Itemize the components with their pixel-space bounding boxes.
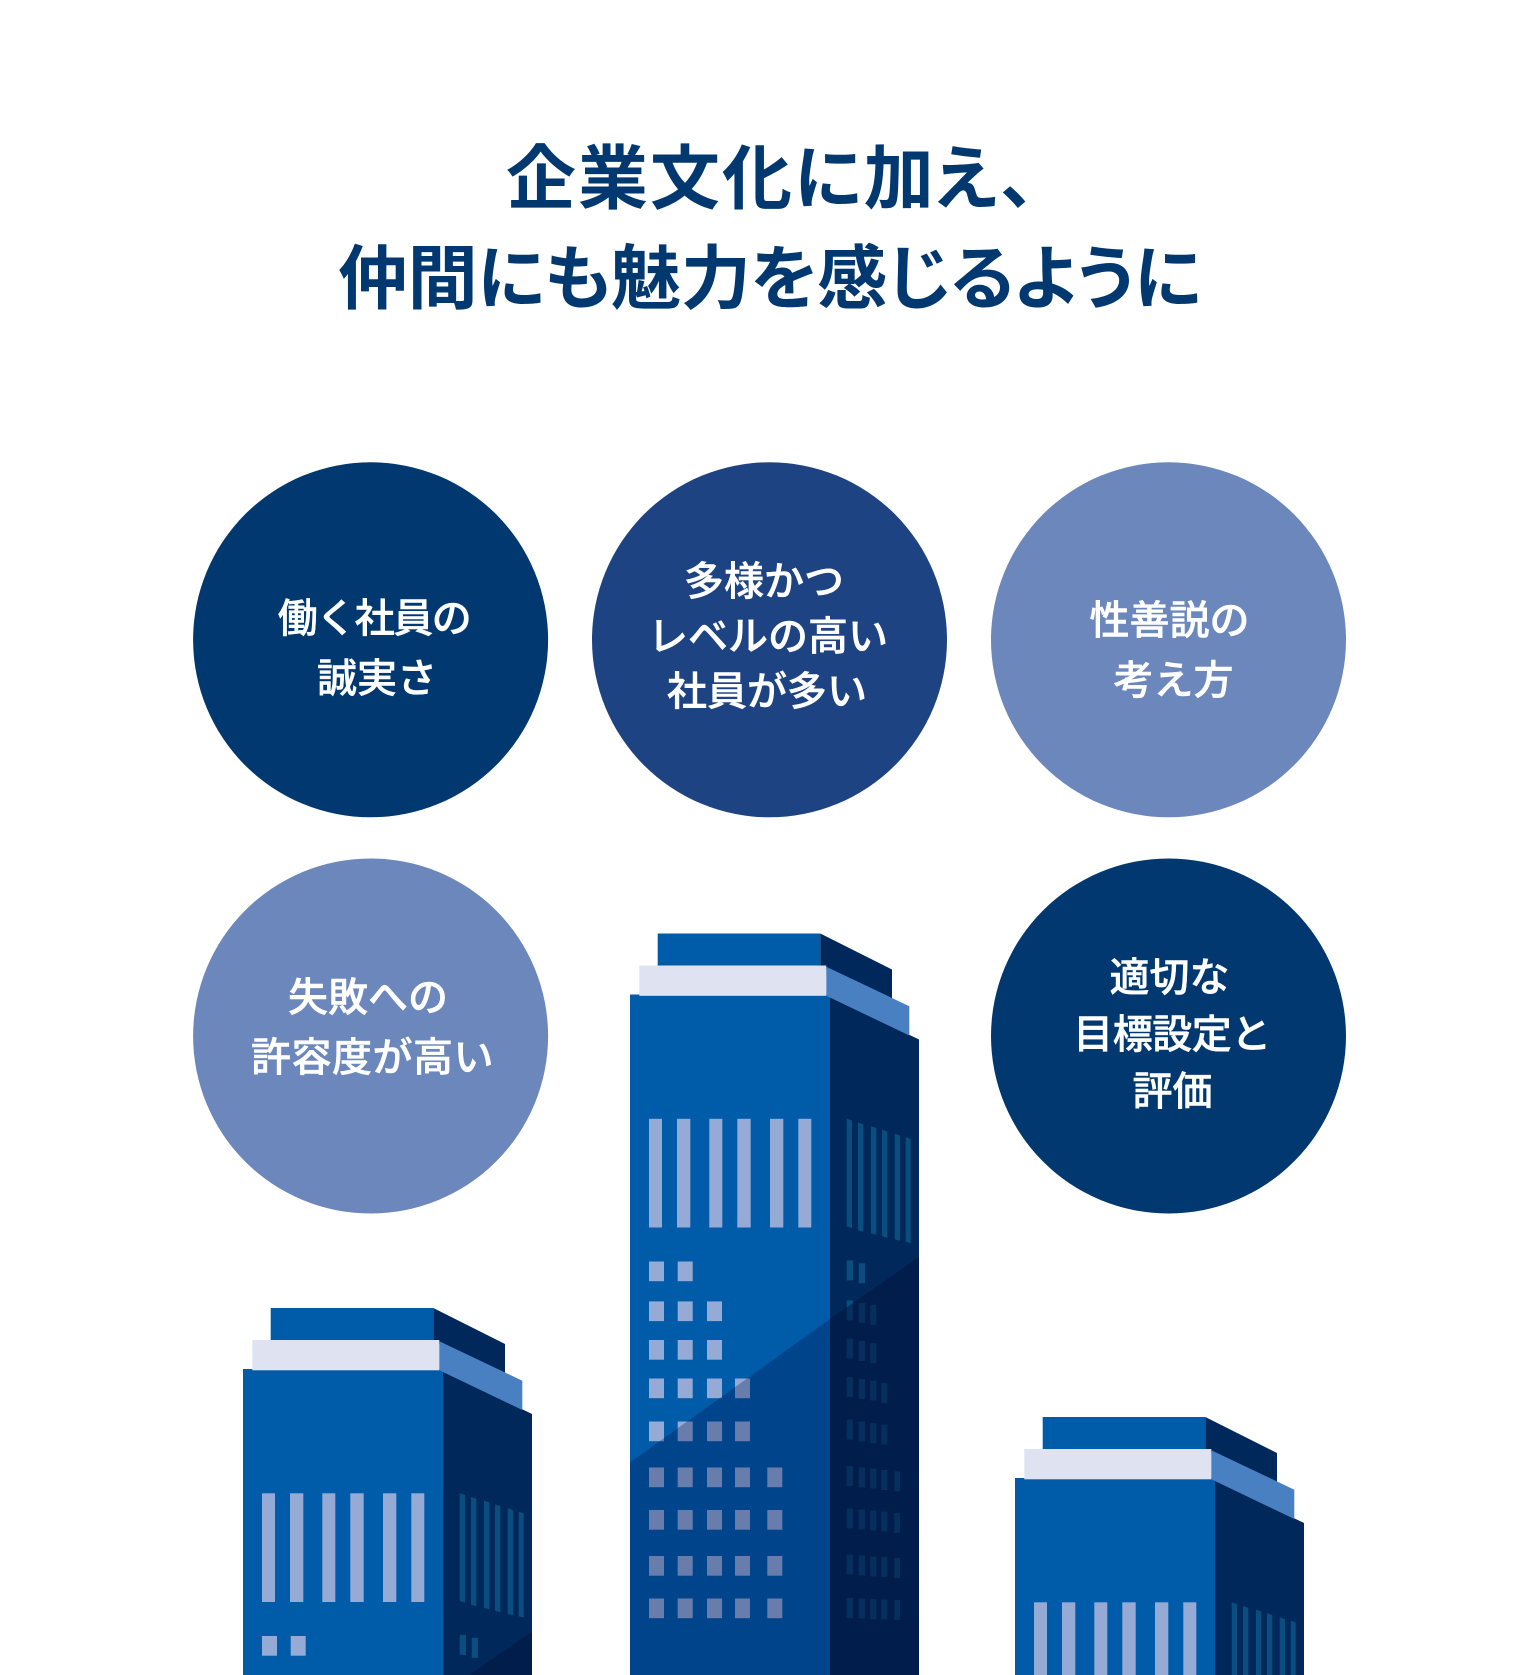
building: center tower: [630, 934, 919, 1675]
circle: 適切な目標設定と評価: 目標設定と: [1073, 1013, 1271, 1057]
circle: 適切な目標設定と評価: [991, 858, 1346, 1214]
circle: 多様かつレベルの高い社員が多い: 多様かつ: [684, 560, 844, 604]
circle: 多様かつレベルの高い社員が多い: レベルの高い: [648, 615, 888, 659]
circle: 適切な目標設定と評価: 評価: [1132, 1070, 1212, 1114]
circle: 性善説の考え方: 性善説の: [1090, 599, 1250, 643]
circle: 適切な目標設定と評価: 適切な: [1110, 956, 1230, 1000]
circle: 性善説の考え方: [991, 462, 1346, 817]
circle: 失敗への許容度が高い: 失敗への: [288, 976, 448, 1020]
title: 企業文化に加え、: [506, 140, 1037, 218]
building: right tower: [1015, 1417, 1304, 1675]
circle: 多様かつレベルの高い社員が多い: [592, 462, 947, 817]
title: [338, 140, 1201, 318]
circle: 多様かつレベルの高い社員が多い: 社員が多い: [667, 670, 867, 714]
circle: 働く社員の誠実さ: [193, 462, 548, 817]
circle: 性善説の考え方: 考え方: [1114, 659, 1234, 703]
circle: 働く社員の誠実さ: 誠実さ: [317, 657, 437, 701]
title: 仲間にも魅力を感じるように: [338, 240, 1201, 318]
circle: 失敗への許容度が高い: [193, 858, 548, 1214]
circle: 失敗への許容度が高い: 許容度が高い: [251, 1036, 494, 1080]
circle: 働く社員の誠実さ: 働く社員の: [278, 597, 470, 641]
building: left tower: [243, 1308, 532, 1675]
